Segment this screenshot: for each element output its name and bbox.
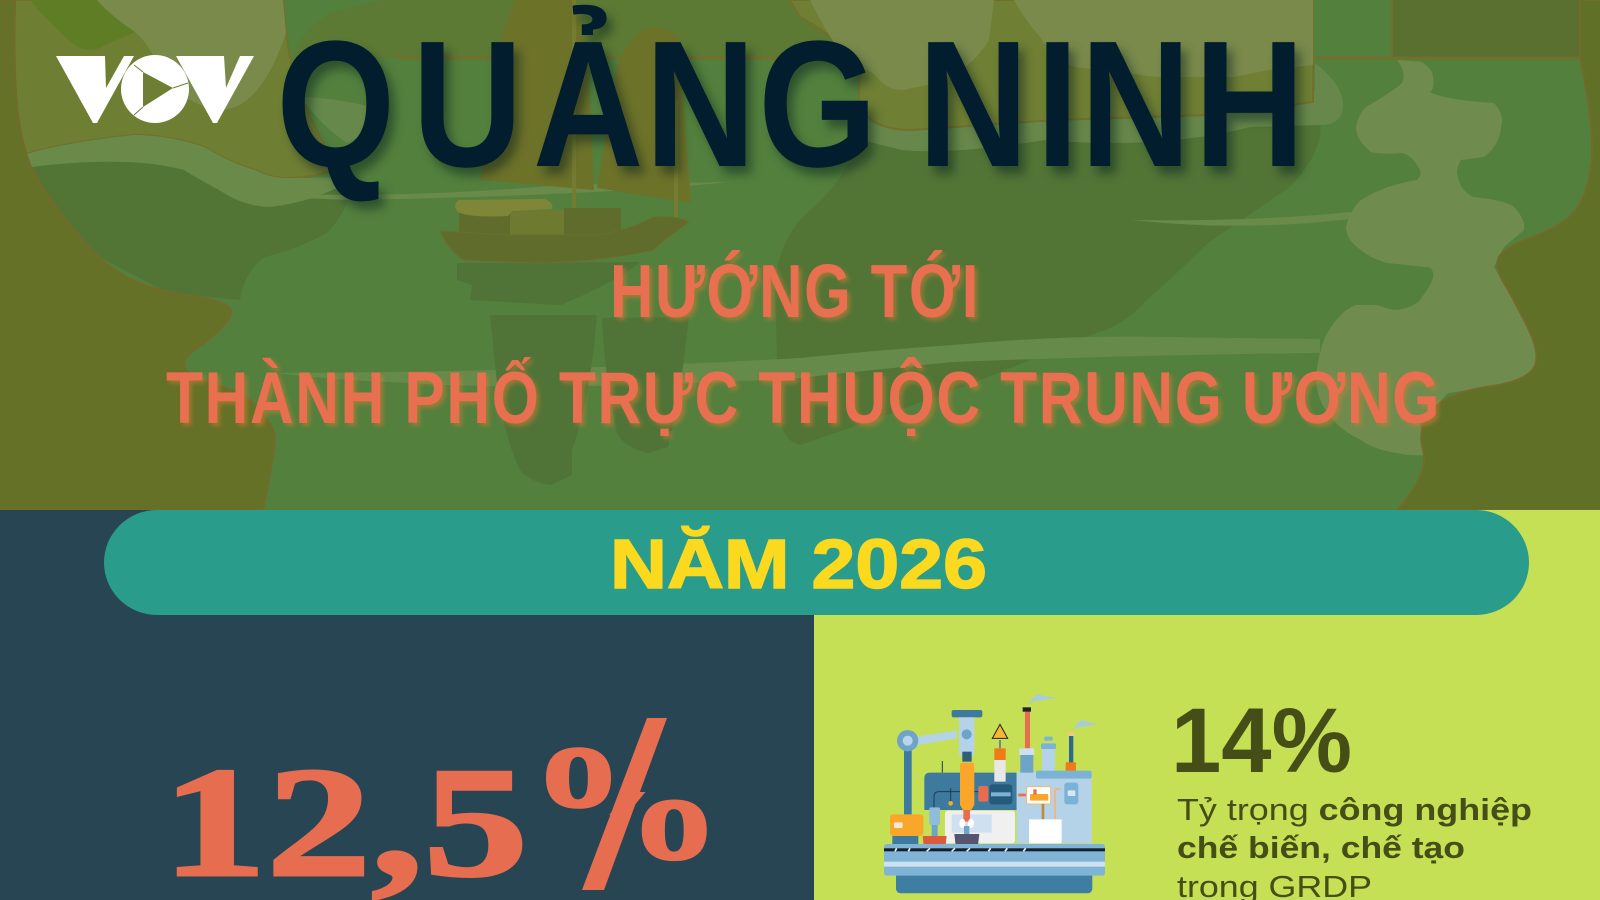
light blob beside the dark hill [861, 63, 1343, 151]
year banner: NĂM 2026 [610, 525, 987, 603]
big number 12,5%: % [527, 711, 724, 894]
thin right water streak [1132, 212, 1351, 226]
pale patch top left [97, 0, 286, 110]
year banner [104, 510, 1529, 615]
boat hull [440, 217, 689, 263]
upper middle hill [293, 0, 860, 58]
title: QUẢNG NINH [276, 4, 1305, 205]
robot arm [904, 747, 912, 817]
conveyor [896, 870, 1092, 893]
boat right sail [597, 27, 691, 203]
lower dark green hill [31, 162, 357, 300]
big number 12,5% [162, 711, 724, 900]
dark hill behind the title [775, 120, 1321, 445]
control units [978, 786, 988, 802]
subtitle [166, 249, 1441, 439]
panel: illustrated landscape header background [0, 0, 1600, 510]
junk boat [440, 0, 691, 263]
pale mountain lobe one [810, 0, 994, 90]
pale mountain lobe two [1014, 0, 1313, 77]
panel: dark left [0, 510, 814, 900]
thin upper water streak [310, 182, 727, 200]
top left olive hill [13, 0, 337, 178]
stat description: chế biến, chế tạo [1177, 831, 1465, 865]
logo: VOV [56, 55, 254, 123]
boat reflection [457, 262, 689, 485]
panel: lime right [814, 510, 1600, 900]
boat roof [455, 199, 552, 216]
light river band left [23, 135, 357, 207]
pale winding river on right [1316, 60, 1542, 455]
stat: 14% [1171, 690, 1532, 900]
bottle and tubs [929, 807, 940, 825]
boat left sail [480, 0, 594, 190]
machine bodies [924, 773, 1017, 810]
middle river band [278, 337, 1320, 387]
stat number: 14% [1171, 690, 1352, 792]
warning sign and vial [992, 724, 1008, 738]
dark rectangle top right [1392, 0, 1580, 58]
right land [1397, 0, 1600, 510]
darker green patch top left [30, 0, 135, 50]
top horizon lines [398, 56, 1580, 60]
boat cabin [459, 213, 510, 234]
chimneys [1025, 712, 1030, 748]
smoke [1028, 694, 1099, 730]
stat description [1177, 793, 1532, 900]
left land [0, 0, 275, 510]
light blob near title Q [305, 98, 366, 143]
icon: factory machine [884, 694, 1105, 893]
central olive mountain [790, 0, 1313, 130]
dispenser [952, 710, 982, 717]
stat description: Tỷ trọng công nghiệp [1177, 793, 1532, 827]
subtitle: HƯỚNG TỚI [610, 249, 980, 333]
